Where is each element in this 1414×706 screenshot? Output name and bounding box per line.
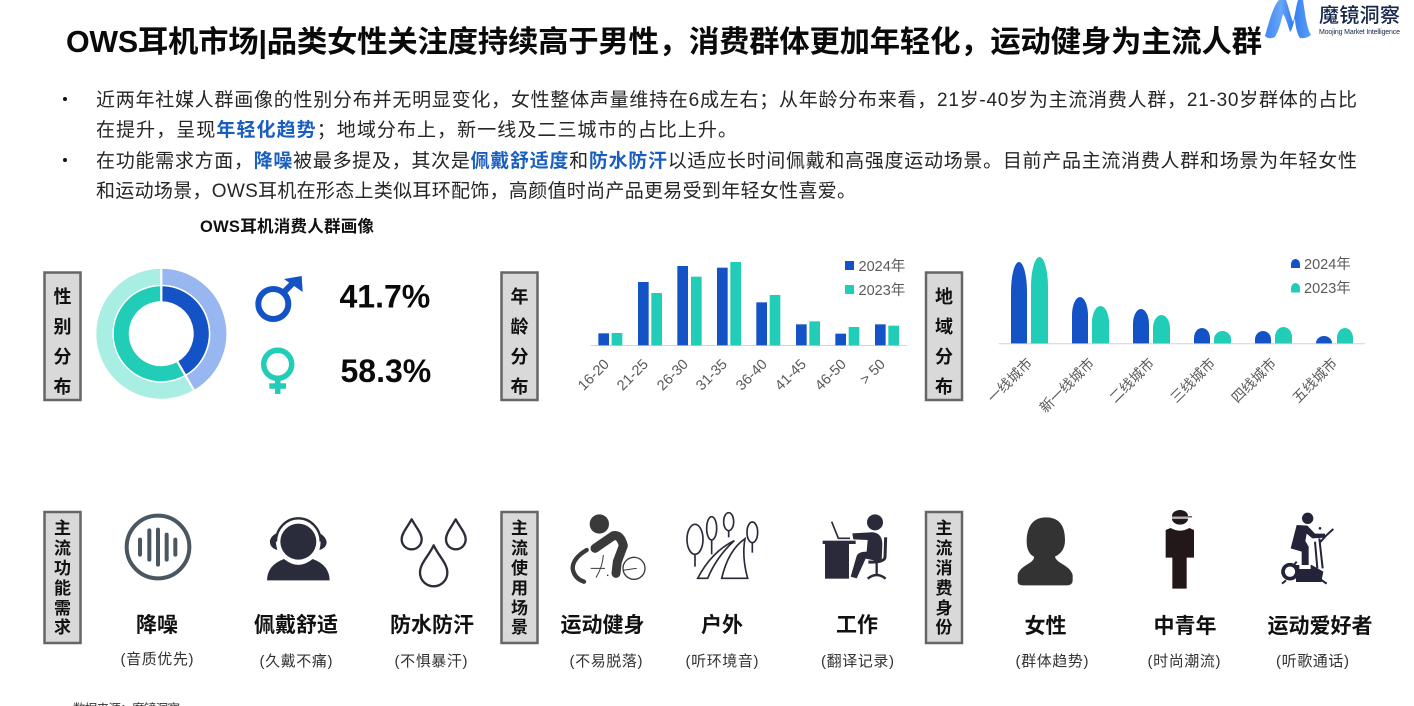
female label: (群体趋势) xyxy=(1016,653,1088,670)
label: 地域分布: 地 xyxy=(935,287,953,307)
label: 主流使用场景: 流 xyxy=(511,539,528,558)
female label xyxy=(1016,615,1088,670)
age legend: 2023年 xyxy=(858,282,905,299)
sport label: (不易脱落) xyxy=(570,653,642,670)
region axis labels: 四线城市 xyxy=(1228,355,1279,406)
comfort label xyxy=(254,613,338,670)
label: 主流消费身份: 费 xyxy=(936,579,952,598)
section heading: OWS耳机消费人群画像 xyxy=(200,217,374,236)
label: 主流使用场景: 使 xyxy=(511,559,528,578)
region legend: 2024年 xyxy=(1304,256,1351,273)
label: 地域分布 xyxy=(926,272,962,400)
fitness fan label: 运动爱好者 xyxy=(1268,615,1372,638)
waterproof label: (不惧暴汗) xyxy=(394,653,468,670)
icon: female symbol xyxy=(264,350,292,394)
work label xyxy=(821,614,894,670)
label: 性别分布: 分 xyxy=(54,347,72,367)
waterproof label: 防水防汗 xyxy=(390,614,474,637)
outdoor label: (听环境音) xyxy=(686,652,758,670)
text block: summary bullets: 和运动场景，OWS耳机在形态上类似耳环配饰，高颜值时尚产品更易受到年轻女性喜爱。 xyxy=(96,180,856,202)
region axis labels: 新一线城市 xyxy=(1036,355,1097,416)
young adult label: 中青年 xyxy=(1154,615,1216,638)
label: 主流消费身份: 身 xyxy=(936,599,952,618)
age legend xyxy=(845,258,905,299)
age axis labels: 31-35 xyxy=(693,357,731,394)
age axis labels: 36-40 xyxy=(733,357,771,394)
label: 主流功能需求: 能 xyxy=(54,579,71,598)
label: 年龄分布: 分 xyxy=(510,347,528,367)
label: 地域分布: 域 xyxy=(935,317,953,337)
label: 主流使用场景: 场 xyxy=(511,599,528,618)
region legend: 2023年 xyxy=(1304,280,1351,297)
label: 年龄分布 xyxy=(502,272,538,400)
label: 主流消费身份 xyxy=(926,512,962,643)
female percentage: 58.3% xyxy=(340,353,431,389)
label: 主流功能需求 xyxy=(44,512,80,643)
work label: (翻译记录) xyxy=(821,653,894,670)
label: 性别分布: 布 xyxy=(54,377,72,397)
label: 主流使用场景: 用 xyxy=(511,579,528,598)
icon: noise reduction xyxy=(127,516,189,578)
logo tagline: Moojing Market Intelligence xyxy=(1319,29,1400,36)
bar chart: age xyxy=(575,258,907,394)
age axis labels: 41-45 xyxy=(772,357,810,394)
region axis labels: 二线城市 xyxy=(1106,355,1157,406)
bar chart: region xyxy=(984,256,1365,416)
noise reduction label: 降噪 xyxy=(136,614,178,637)
text block: summary bullets: 在功能需求方面，降噪被最多提及，其次是佩戴舒适度和防水防汗以适应长时间佩戴和高强度运动场景。目前产品主流消费人群和场景为年轻女性 xyxy=(96,149,1357,172)
region axis labels: 三线城市 xyxy=(1167,355,1218,406)
age axis labels: 21-25 xyxy=(614,357,652,394)
panel: gender distribution xyxy=(44,266,431,400)
label: 主流功能需求: 功 xyxy=(54,559,71,578)
label: 主流消费身份: 主 xyxy=(936,519,952,538)
icon: woman silhouette xyxy=(1018,517,1073,585)
female label: 女性 xyxy=(1024,615,1066,638)
panel: main functional needs xyxy=(44,512,474,670)
icon: outdoor road and trees xyxy=(687,513,758,578)
label: 主流使用场景: 主 xyxy=(511,519,528,538)
noise reduction label xyxy=(120,614,194,668)
panel: main usage scenes xyxy=(502,512,894,670)
age legend: 2024年 xyxy=(858,258,905,275)
text block: summary bullets xyxy=(63,89,1357,202)
label: 主流消费身份: 份 xyxy=(936,618,952,637)
age axis labels: > 50 xyxy=(857,357,889,388)
logo name: 魔镜洞察 xyxy=(1319,4,1400,27)
label: 年龄分布: 年 xyxy=(510,286,528,307)
icon: headset wearer xyxy=(267,518,330,580)
label: 性别分布 xyxy=(44,272,80,400)
work label: 工作 xyxy=(836,614,878,637)
panel: main consumer identity xyxy=(926,510,1372,670)
region legend xyxy=(1291,256,1351,297)
fitness fan label: (听歌通话) xyxy=(1276,653,1349,670)
label: 性别分布: 别 xyxy=(54,317,72,337)
panel: regional distribution xyxy=(926,256,1365,416)
panel: age distribution xyxy=(502,258,907,400)
label: 主流功能需求: 需 xyxy=(54,599,71,618)
comfort label: (久戴不痛) xyxy=(260,653,332,670)
icon: male symbol xyxy=(258,276,303,319)
label: 主流消费身份: 流 xyxy=(936,539,952,558)
label: 性别分布: 性 xyxy=(54,287,72,307)
fitness fan label xyxy=(1268,615,1372,670)
label: 年龄分布: 龄 xyxy=(510,316,528,337)
age axis labels: 26-30 xyxy=(654,357,692,394)
label: 地域分布: 分 xyxy=(935,347,953,367)
icon: person at desk xyxy=(823,514,886,579)
donut chart xyxy=(104,266,218,394)
text block: summary bullets: 在提升，呈现年轻化趋势；地域分布上，新一线及二三城市的占比上升。 xyxy=(96,118,737,141)
text block: summary bullets: 近两年社媒人群画像的性别分布并无明显变化，女性整体声量维持在6成左右；从年龄分布来看，21岁-40岁为主流消费人群，21-30岁群体的占比 xyxy=(96,89,1357,111)
young adult label xyxy=(1148,615,1220,670)
age axis labels: 46-50 xyxy=(812,357,850,394)
label: 地域分布: 布 xyxy=(935,377,953,397)
comfort label: 佩戴舒适 xyxy=(254,613,338,637)
label: 主流消费身份: 消 xyxy=(936,559,952,578)
icon: elliptical trainer user xyxy=(1282,513,1333,584)
waterproof label xyxy=(390,614,474,670)
age axis labels xyxy=(575,357,889,394)
region axis labels: 一线城市 xyxy=(984,355,1035,406)
outdoor label: 户外 xyxy=(701,614,743,637)
label: 主流使用场景: 景 xyxy=(511,618,528,637)
label: 主流功能需求: 主 xyxy=(54,519,71,538)
age axis labels: 16-20 xyxy=(575,357,613,394)
icon: young person with cap xyxy=(1166,510,1194,589)
title: OWS耳机市场|品类女性关注度持续高于男性，消费群体更加年轻化，运动健身为主流人群 xyxy=(66,25,1262,59)
sport label xyxy=(560,614,644,670)
icon: cyclist xyxy=(573,514,645,582)
logo: Moojing xyxy=(1265,0,1400,38)
male percentage: 41.7% xyxy=(340,278,430,314)
label: 主流使用场景 xyxy=(502,512,538,643)
label: 年龄分布: 布 xyxy=(510,377,528,397)
label: 主流功能需求: 流 xyxy=(54,539,71,558)
region axis labels: 五线城市 xyxy=(1289,355,1340,406)
label: 主流功能需求: 求 xyxy=(54,618,71,637)
region axis labels xyxy=(984,355,1340,416)
outdoor label xyxy=(686,614,758,670)
sport label: 运动健身 xyxy=(560,614,644,637)
icon: water drops xyxy=(402,519,466,586)
young adult label: (时尚潮流) xyxy=(1148,653,1220,670)
noise reduction label: (音质优先) xyxy=(120,651,194,668)
